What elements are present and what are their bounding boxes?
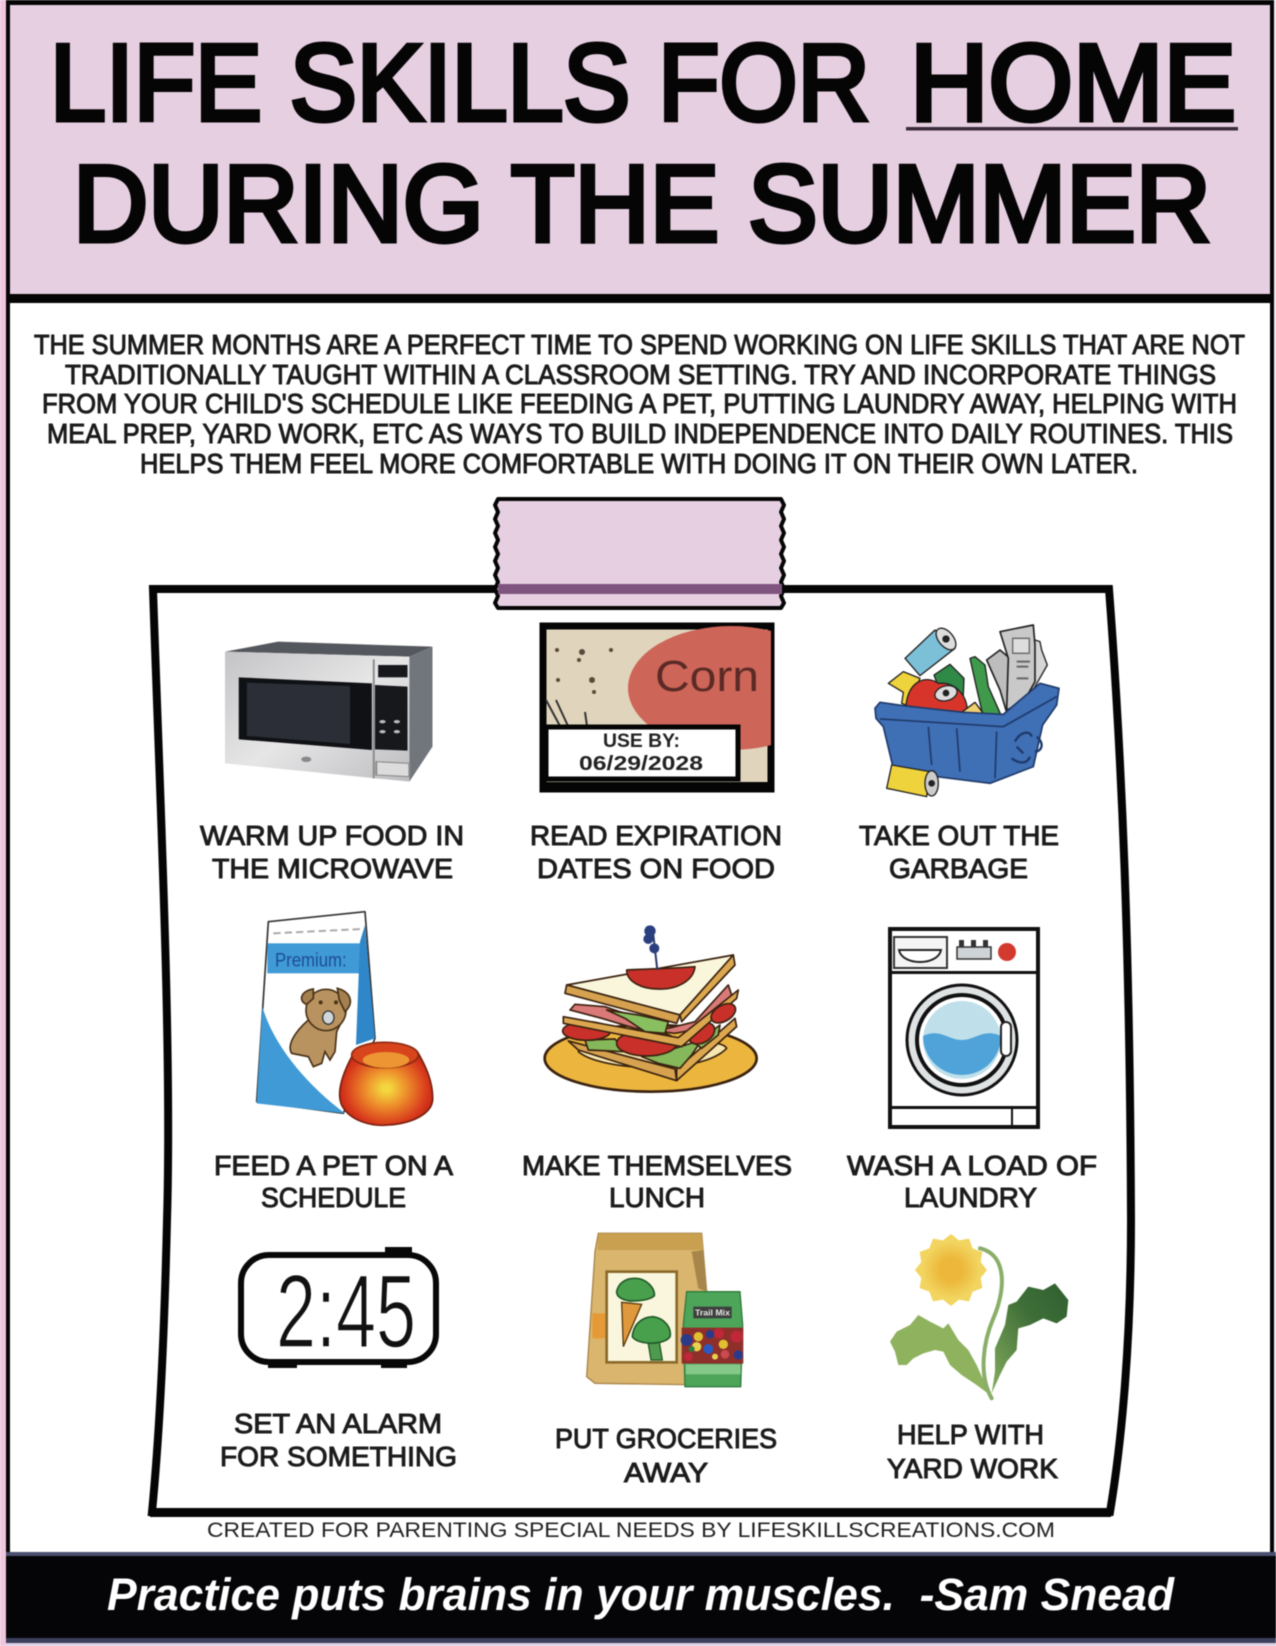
label: feed a pet: SCHEDULE — [261, 1182, 406, 1213]
item: microwave — [200, 642, 464, 884]
label: feed a pet — [214, 1150, 453, 1213]
item: set alarm — [220, 1247, 457, 1472]
intro paragraph: HELPS THEM FEEL MORE COMFORTABLE WITH DOING IT ON THEIR OWN LATER. — [140, 448, 1138, 479]
footer quote bar — [6, 1552, 1276, 1646]
title: DURING THE SUMMER — [73, 143, 1211, 265]
note panel frame — [150, 589, 1131, 1517]
title: HOME — [910, 22, 1236, 144]
icon: corn can label — [538, 622, 776, 794]
washi tape — [495, 499, 784, 608]
label: help with yard work: HELP WITH — [897, 1419, 1044, 1450]
title — [50, 22, 1238, 265]
label: make lunch: LUNCH — [609, 1182, 705, 1213]
icon: washing machine — [890, 929, 1038, 1127]
intro paragraph: TRADITIONALLY TAUGHT WITHIN A CLASSROOM SETTING. TRY AND INCORPORATE THINGS — [65, 359, 1216, 390]
header banner — [6, 0, 1274, 303]
icon: recycling bin — [875, 625, 1059, 797]
icon: corn can label: 06/29/2028 — [579, 753, 703, 775]
label: wash laundry: LAUNDRY — [904, 1182, 1037, 1213]
icon: corn can label: Corn — [655, 652, 759, 701]
title: LIFE SKILLS FOR — [50, 22, 870, 144]
icon: grocery bags: Trail Mix — [695, 1308, 730, 1318]
label: help with yard work: YARD WORK — [887, 1453, 1058, 1484]
label: read expiration: READ EXPIRATION — [530, 820, 782, 851]
label: warm up food: THE MICROWAVE — [212, 853, 453, 884]
label: read expiration: DATES ON FOOD — [537, 853, 775, 884]
quote: Practice puts brains in your muscles. -Sam Snead — [107, 1569, 1175, 1620]
icon: corn can label: USE BY: — [603, 731, 680, 752]
item: garbage — [859, 625, 1059, 884]
item: feed a pet — [214, 912, 453, 1213]
item: yard work — [887, 1234, 1068, 1484]
label: read expiration — [530, 820, 782, 884]
icon: dandelion — [890, 1234, 1068, 1398]
label: warm up food — [200, 820, 464, 884]
icon: digital clock: 2:45 — [276, 1254, 416, 1370]
icon: pet food and bowl: Premium: — [275, 951, 347, 972]
item: laundry — [847, 929, 1097, 1213]
icon: grocery bags — [587, 1233, 743, 1387]
label: wash laundry — [847, 1150, 1097, 1213]
label: put groceries — [555, 1423, 777, 1488]
label: take out garbage — [859, 820, 1059, 884]
item: groceries — [555, 1233, 777, 1488]
label: set alarm — [220, 1408, 457, 1472]
item: make lunch — [522, 925, 792, 1213]
icon: sandwich on plate — [545, 925, 757, 1092]
icon: pet food and bowl — [257, 912, 433, 1125]
intro paragraph — [34, 329, 1245, 479]
label: feed a pet: FEED A PET ON A — [214, 1150, 453, 1181]
label: set alarm: FOR SOMETHING — [220, 1441, 457, 1472]
label: put groceries: AWAY — [624, 1457, 708, 1488]
credit line: CREATED FOR PARENTING SPECIAL NEEDS BY LIFESKILLSCREATIONS.COM — [207, 1519, 1055, 1542]
label: warm up food: WARM UP FOOD IN — [200, 820, 464, 851]
item: expiration date — [531, 622, 782, 880]
label: take out garbage: TAKE OUT THE — [859, 820, 1059, 851]
label: help with yard work — [887, 1419, 1058, 1484]
icon: microwave — [225, 642, 432, 782]
label: make lunch: MAKE THEMSELVES — [522, 1150, 792, 1181]
icon: digital clock — [241, 1247, 436, 1370]
label: wash laundry: WASH A LOAD OF — [847, 1150, 1097, 1181]
label: put groceries: PUT GROCERIES — [555, 1423, 777, 1454]
label: take out garbage: GARBAGE — [889, 853, 1028, 884]
label: set alarm: SET AN ALARM — [234, 1408, 442, 1439]
label: make lunch — [522, 1150, 792, 1213]
